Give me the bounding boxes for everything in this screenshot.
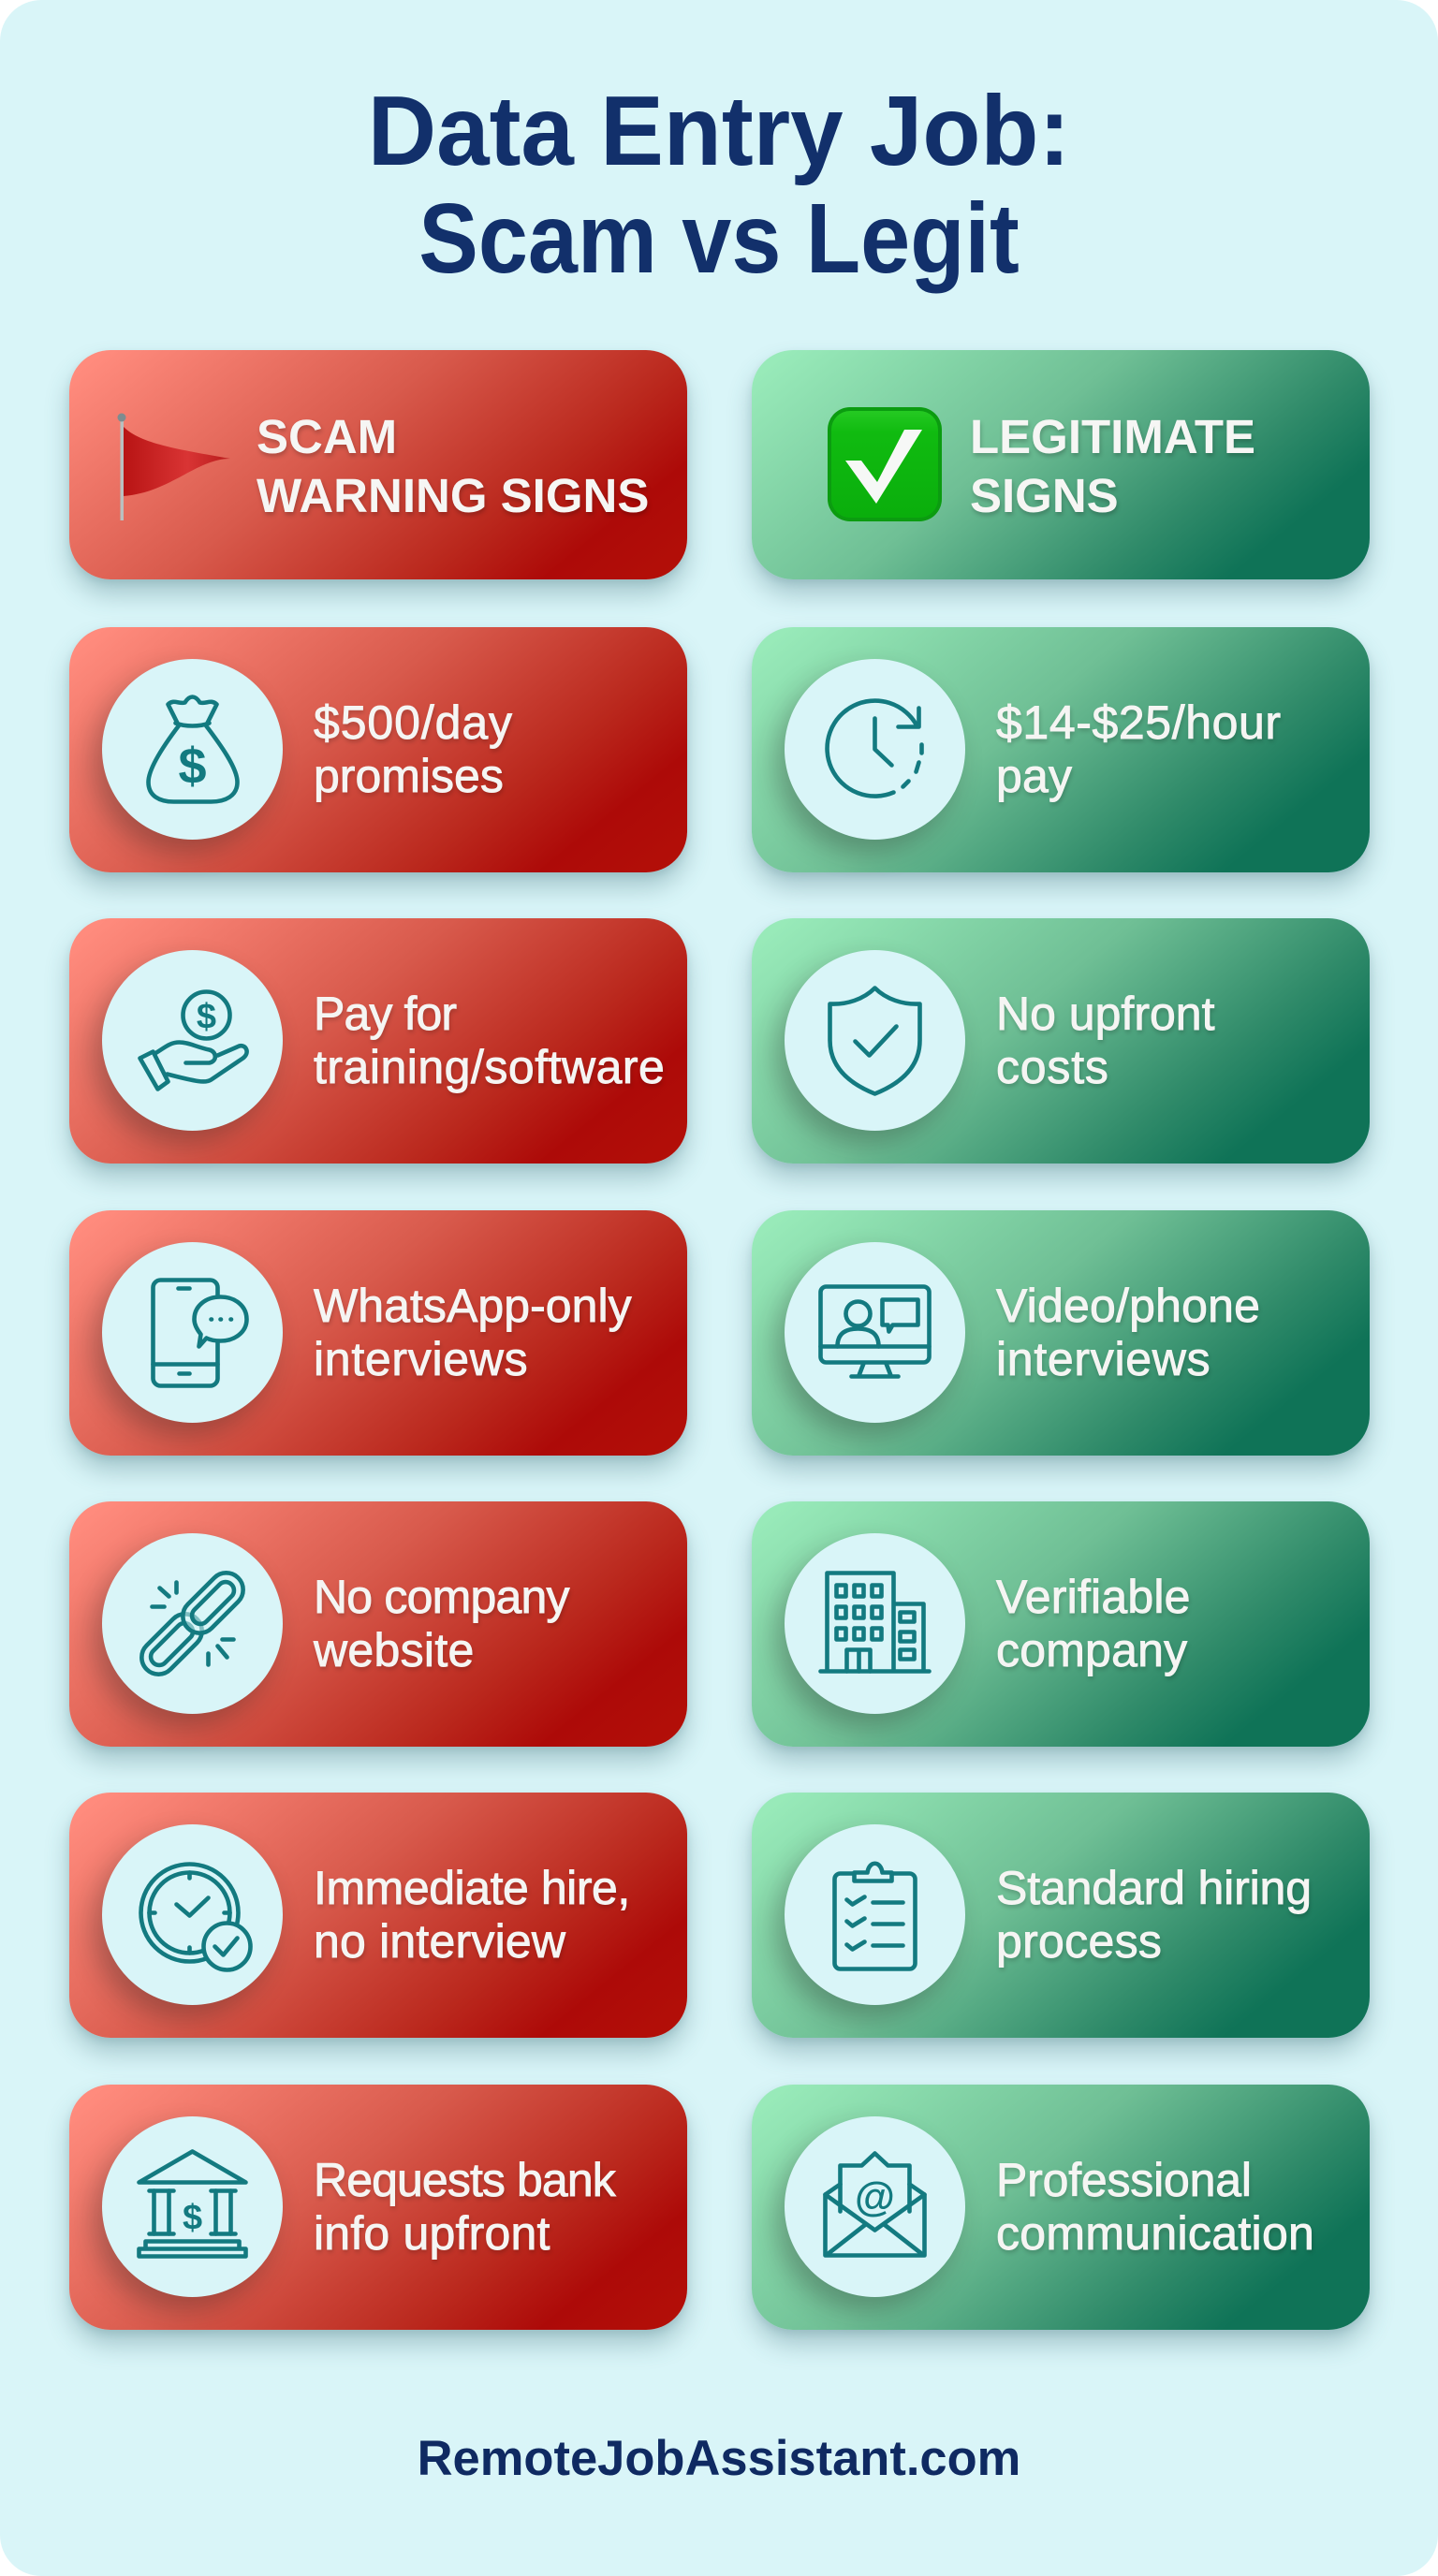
card: no company website [69, 1501, 687, 1747]
icon: bank with dollar: $ [183, 2198, 202, 2237]
card: no company website: No company [314, 1571, 569, 1623]
title: Data Entry Job: [368, 76, 1070, 186]
panel header: scam warning signs [69, 350, 687, 579]
icon: hand with coin: $ [197, 998, 216, 1037]
card: no company website: website [314, 1624, 475, 1676]
card: requests bank info upfront: Requests bank [314, 2154, 615, 2206]
card: immediate hire, no interview: Immediate hire, [314, 1862, 630, 1914]
panel header: legitimate signs [752, 350, 1370, 579]
card: requests bank info upfront: info upfront [314, 2207, 550, 2260]
card: whatsapp-only interviews: interviews [314, 1333, 528, 1385]
text [996, 2154, 1314, 2260]
text [314, 696, 513, 806]
card: standard hiring process: process [996, 1915, 1162, 1968]
text [996, 696, 1282, 806]
icon: broken chain link [102, 1533, 283, 1714]
icon: open envelope with @: @ [855, 2174, 895, 2220]
heading: legitimate signs: LEGITIMATE [970, 410, 1255, 463]
text [314, 1862, 630, 1968]
card: $500/day promises [69, 627, 687, 872]
card: pay for training/software [69, 918, 687, 1164]
card: whatsapp-only interviews: WhatsApp-only [314, 1280, 632, 1332]
card: verifiable company [752, 1501, 1370, 1747]
card: pay for training/software: training/software [314, 1041, 665, 1093]
text [996, 1862, 1312, 1971]
card: professional communication: communication [996, 2207, 1314, 2260]
icon: phone with chat bubble [102, 1242, 283, 1423]
icon: green check box [828, 407, 942, 521]
heading: scam warning signs: WARNING SIGNS [257, 469, 649, 522]
heading: scam warning signs [257, 410, 650, 522]
text [996, 1571, 1191, 1679]
icon: open envelope with @ [785, 2116, 965, 2297]
title: Scam vs Legit [418, 183, 1020, 294]
card: $14-$25/hour pay: $14-$25/hour [996, 696, 1282, 749]
icon: hand with coin [102, 950, 283, 1131]
card: $500/day promises: promises [314, 750, 504, 802]
card: verifiable company: company [996, 1624, 1187, 1676]
card: immediate hire, no interview: no interview [314, 1915, 565, 1968]
icon: video call monitor [785, 1242, 965, 1423]
card: professional communication: Professional [996, 2154, 1252, 2206]
title [368, 76, 1070, 294]
card: verifiable company: Verifiable [996, 1571, 1191, 1623]
footer website: RemoteJobAssistant.com [418, 2431, 1020, 2486]
card: no upfront costs: costs [996, 1041, 1109, 1093]
icon: office building [785, 1533, 965, 1714]
text [314, 988, 665, 1097]
card: standard hiring process [752, 1793, 1370, 2038]
text [314, 2154, 617, 2263]
icon: clipboard checklist [785, 1824, 965, 2005]
icon: money bag [102, 659, 283, 840]
heading: legitimate signs: SIGNS [970, 469, 1119, 522]
card: video/phone interviews [752, 1210, 1370, 1456]
card: video/phone interviews: Video/phone [996, 1280, 1260, 1332]
text [996, 988, 1215, 1093]
card: $14-$25/hour pay [752, 627, 1370, 872]
icon: bank with dollar [102, 2116, 283, 2297]
heading: scam warning signs: SCAM [257, 410, 397, 463]
text [313, 1571, 571, 1676]
icon: red flag [118, 414, 230, 520]
text [996, 1280, 1260, 1385]
card: $500/day promises: $500/day [314, 696, 513, 749]
card: no upfront costs [752, 918, 1370, 1164]
card: professional communication [752, 2085, 1370, 2330]
card: standard hiring process: Standard hiring [996, 1862, 1312, 1914]
card: no upfront costs: No upfront [996, 988, 1214, 1040]
card: whatsapp-only interviews [69, 1210, 687, 1456]
card: requests bank info upfront [69, 2085, 687, 2330]
card: $14-$25/hour pay: pay [996, 750, 1072, 802]
icon: clock with check badge [102, 1824, 283, 2005]
card: video/phone interviews: interviews [996, 1333, 1211, 1385]
card: immediate hire, no interview [69, 1793, 687, 2038]
icon: shield check [785, 950, 965, 1131]
text [313, 1280, 633, 1385]
heading: legitimate signs [970, 410, 1255, 522]
card: pay for training/software: Pay for [314, 988, 456, 1040]
icon: money bag: $ [178, 738, 207, 794]
icon: clock with arrow [785, 659, 965, 840]
